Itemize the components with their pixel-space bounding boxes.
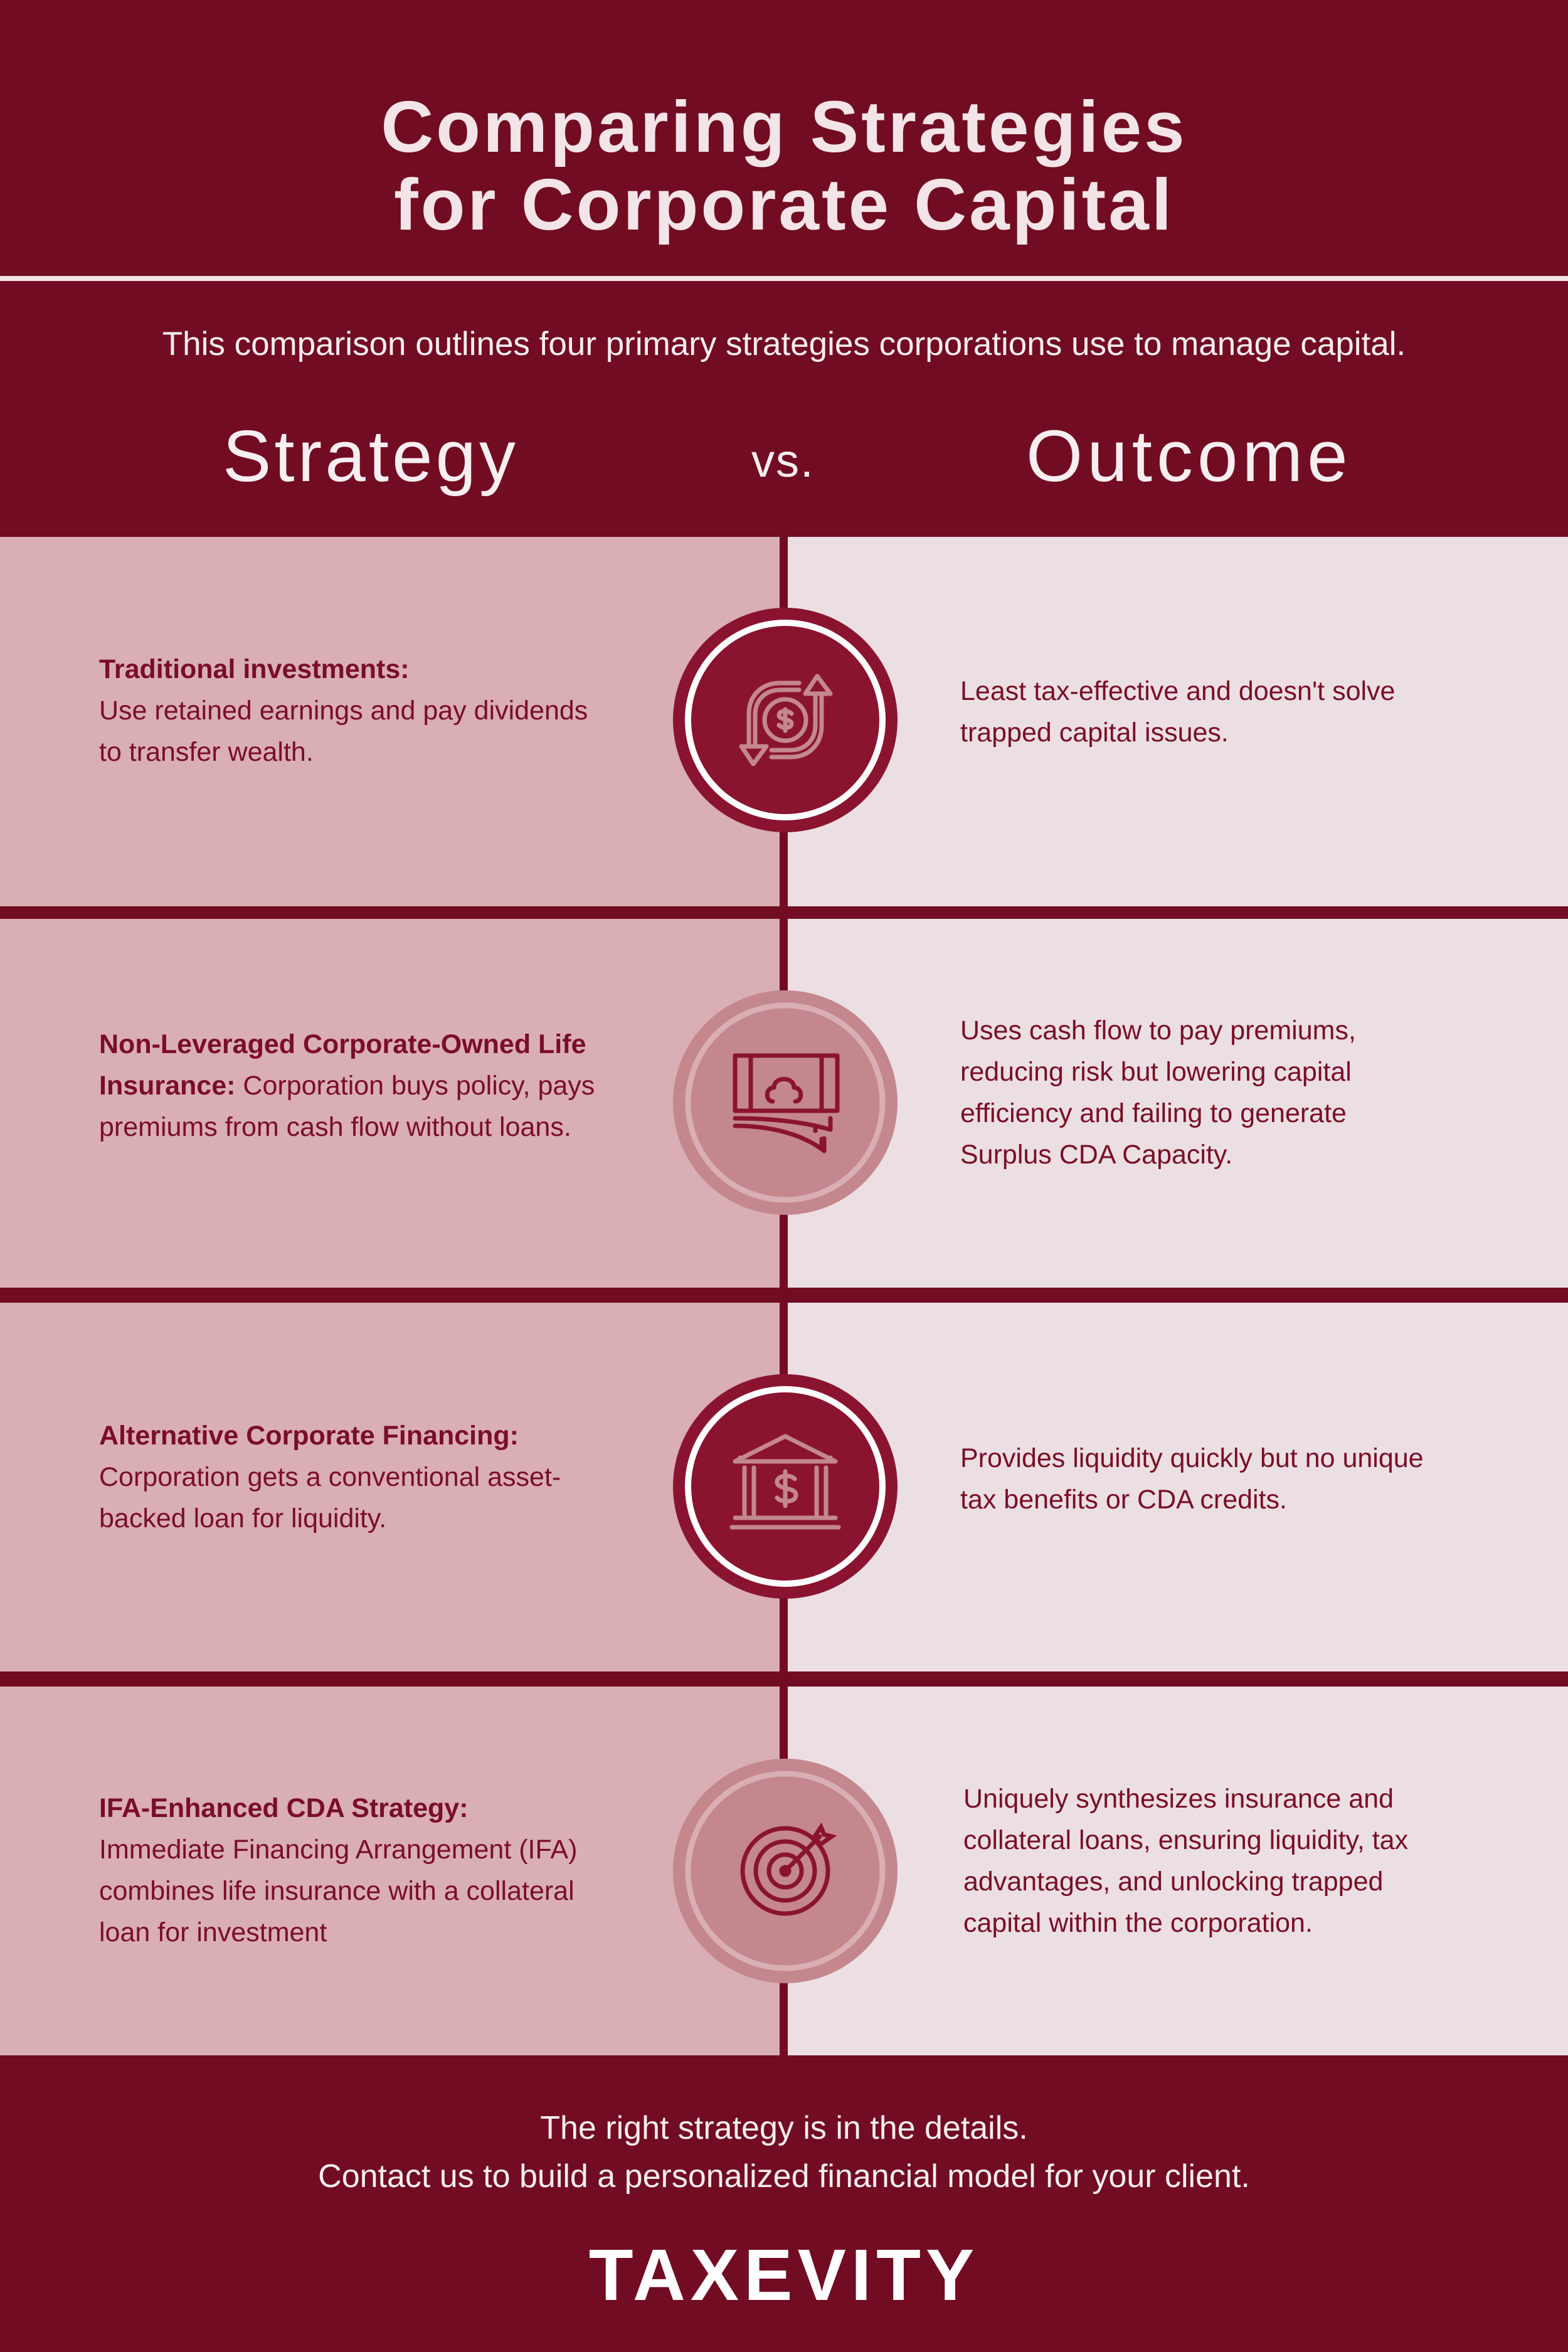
- text: IFA: combines life insurance with a collateral: [99, 1876, 575, 1906]
- row 3 right panel: [787, 1303, 1568, 1671]
- outcome 2: efficiency and failing to generate: [960, 1098, 1347, 1128]
- icon: target: [673, 1759, 898, 1983]
- outcome 4: collateral loans, ensuring liquidity, tax: [963, 1825, 1408, 1855]
- outcome 2: [960, 1015, 1356, 1170]
- text: alternative financing: [99, 1421, 561, 1534]
- icon: bank: [673, 1374, 898, 1599]
- row 1 left panel: [0, 537, 783, 906]
- text: IFA: [99, 1793, 577, 1947]
- text: traditional investments: [99, 654, 588, 767]
- text: IFA: loan for investment: [99, 1917, 327, 1947]
- outcome 4: advantages, and unlocking trapped: [963, 1867, 1383, 1897]
- text: non-leveraged: Insurance: Corporation buys policy, pays: [99, 1071, 595, 1101]
- heading: outcome: Outcome: [1026, 415, 1352, 497]
- logo: TAXEVITY: [589, 2234, 979, 2316]
- outcome 4: Uniquely synthesizes insurance and: [963, 1784, 1394, 1814]
- outcome 4: [963, 1784, 1408, 1938]
- outcome 4: capital within the corporation.: [963, 1908, 1313, 1938]
- icon: cash bills: [673, 990, 898, 1215]
- text: non-leveraged: Non-Leveraged Corporate-Owned Life: [99, 1029, 586, 1059]
- heading: strategy: Strategy: [223, 415, 519, 497]
- outcome 1: trapped capital issues.: [960, 718, 1229, 748]
- heading: vs: vs.: [751, 435, 815, 487]
- footer message: Contact us to build a personalized financial model for your client.: [318, 2158, 1250, 2195]
- row 4 right panel: [787, 1687, 1568, 2055]
- row 3 left panel: [0, 1303, 783, 1671]
- title: [381, 86, 1187, 245]
- text: alternative financing: Corporation gets a conventional asset-: [99, 1462, 561, 1492]
- text: alternative financing: Alternative Corporate Financing:: [99, 1421, 519, 1451]
- row 2 right panel: [787, 919, 1568, 1288]
- outcome 3: tax benefits or CDA credits.: [960, 1485, 1287, 1515]
- outcome 1: Least tax-effective and doesn't solve: [960, 676, 1395, 706]
- row 2 left panel: [0, 919, 783, 1288]
- row 4 left panel: [0, 1687, 783, 2055]
- title: for Corporate Capital: [394, 164, 1174, 245]
- outcome 2: Uses cash flow to pay premiums,: [960, 1015, 1356, 1046]
- subtitle: This comparison outlines four primary strategies corporations use to manage capital.: [162, 326, 1406, 363]
- title: Comparing Strategies: [381, 86, 1187, 167]
- outcome 2: Surplus CDA Capacity.: [960, 1140, 1232, 1170]
- text: traditional investments: Use retained earnings and pay dividends: [99, 696, 588, 726]
- footer message: [318, 2110, 1250, 2195]
- text: traditional investments: Traditional investments:: [99, 654, 410, 684]
- outcome 3: Provides liquidity quickly but no unique: [960, 1443, 1424, 1473]
- text: IFA: IFA-Enhanced CDA Strategy:: [99, 1793, 469, 1823]
- outcome 2: reducing risk but lowering capital: [960, 1057, 1352, 1087]
- outcome 3: [960, 1443, 1424, 1515]
- text: traditional investments: to transfer wealth.: [99, 737, 314, 767]
- text: alternative financing: backed loan for liquidity.: [99, 1503, 386, 1534]
- text: non-leveraged: premiums from cash flow without loans.: [99, 1112, 571, 1142]
- outcome 1: [960, 676, 1395, 748]
- icon: money exchange: [673, 608, 898, 832]
- text: non-leveraged: [99, 1029, 595, 1142]
- text: IFA: Immediate Financing Arrangement (IFA): [99, 1835, 577, 1865]
- footer message: The right strategy is in the details.: [540, 2110, 1028, 2146]
- row 1 right panel: [787, 537, 1568, 906]
